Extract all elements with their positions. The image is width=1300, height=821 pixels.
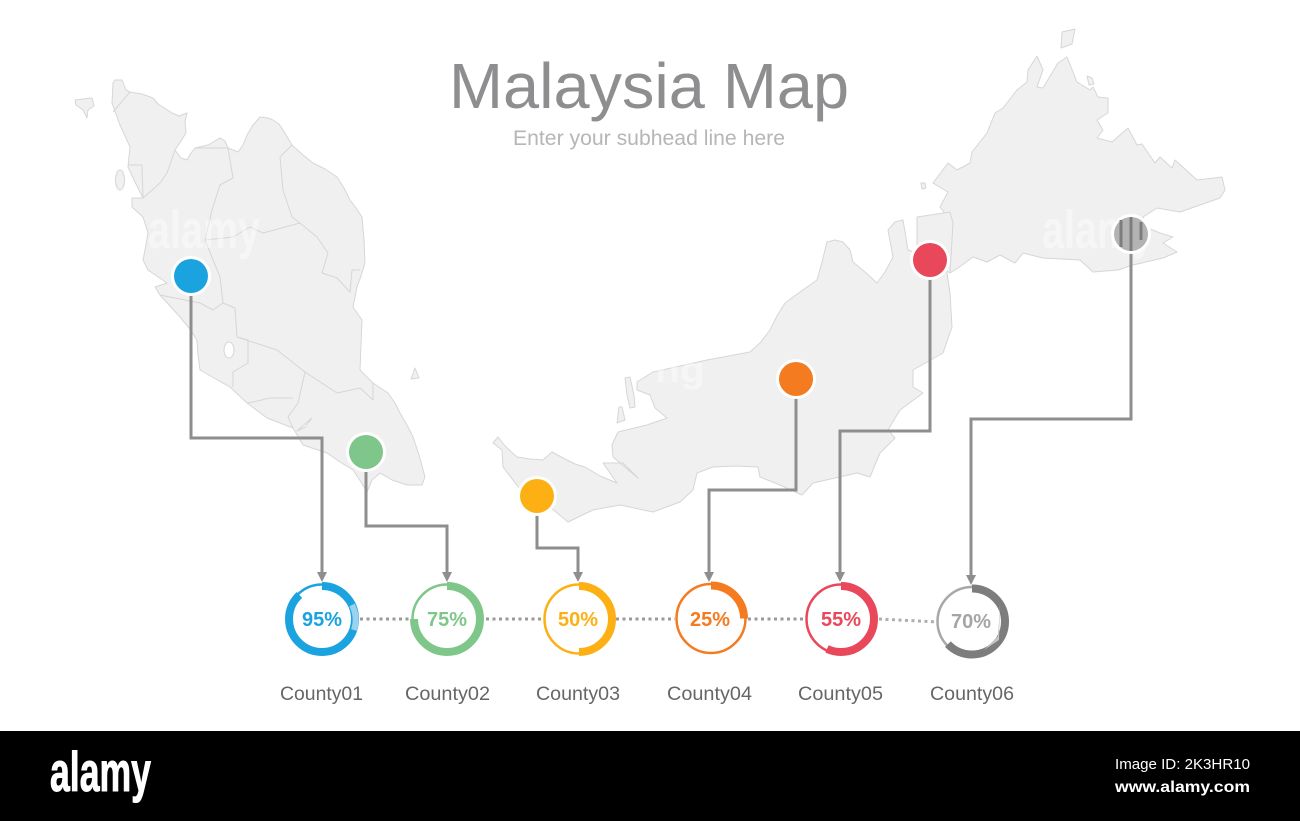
ring: County01 95% (288, 584, 356, 654)
pin: green (346, 432, 386, 472)
connector: pin 5 to County05 (835, 279, 930, 582)
footer logo: alamy (50, 740, 151, 803)
labels: county names: County06 (930, 684, 1014, 705)
labels: county names: County01 (280, 684, 363, 705)
labels: county names: County03 (536, 684, 620, 705)
map: Peninsular Malaysia (75, 80, 425, 492)
labels: county names: County04 (667, 684, 752, 705)
website: www.alamy.com (1114, 779, 1250, 796)
ring: County03 50%: 50% (558, 609, 598, 631)
pin: grey (1111, 214, 1151, 254)
connector: pin 4 to County04 (704, 398, 796, 582)
watermark: map overlay: alamy (1042, 200, 1154, 260)
ring: County04 25% (676, 584, 746, 653)
ring: County04 25%: 25% (690, 609, 730, 631)
labels: county names: County02 (405, 684, 490, 705)
pin: orange (776, 359, 816, 399)
subhead: Enter your subhead line here (513, 127, 785, 150)
dotted connector line (360, 619, 938, 622)
ring: County06 70% (938, 587, 1006, 656)
ring: County06 70%: 70% (951, 611, 991, 633)
footer bar (0, 731, 1300, 821)
ring: County05 55% (806, 584, 876, 654)
connector: pin 3 to County03 (537, 514, 583, 582)
pin: red (910, 240, 950, 280)
connector: pin 6 to County06 (966, 252, 1131, 585)
pin: yellow (517, 476, 557, 516)
ring: County01 95%: 95% (302, 609, 342, 631)
ring: County02 75% (412, 584, 482, 654)
connector: pin 1 to County01 (191, 295, 327, 582)
map: Sarawak (493, 220, 952, 522)
ring: County05 55%: 55% (821, 609, 861, 631)
map: Sabah (917, 29, 1225, 273)
watermark: map overlay: ng (655, 349, 705, 390)
labels: county names (280, 684, 1014, 705)
ring: County03 50% (544, 584, 614, 654)
pin: blue (171, 256, 211, 296)
connector: pin 2 to County02 (366, 472, 452, 582)
watermark: map overlay: alamy (148, 200, 260, 260)
ring: County02 75%: 75% (427, 609, 467, 631)
watermark: map overlay (148, 200, 1154, 390)
image id: Image ID: 2K3HR10 (1115, 756, 1250, 773)
title: Malaysia Map (449, 50, 849, 122)
labels: county names: County05 (798, 684, 883, 705)
